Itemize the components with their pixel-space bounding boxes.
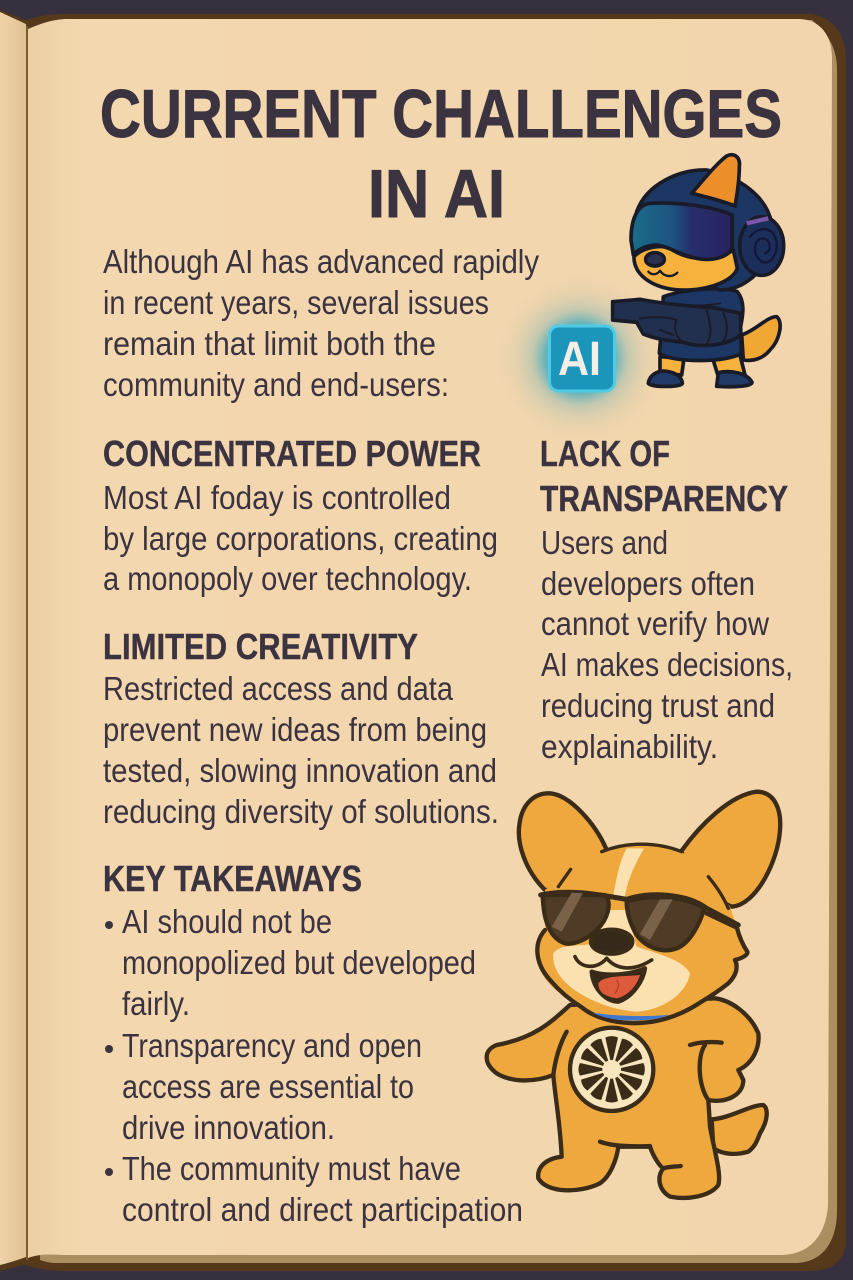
- section: key takeaways: fairly.: [122, 985, 190, 1022]
- section: limited creativity: [103, 626, 499, 830]
- section: key takeaways: control and direct participation: [122, 1191, 523, 1228]
- section: lack of transparency: AI makes decisions,: [541, 646, 793, 683]
- section: lack of transparency: TRANSPARENCY: [540, 478, 788, 519]
- section: limited creativity: tested, slowing innovation and: [103, 752, 497, 789]
- section: lack of transparency: cannot verify how: [541, 605, 769, 642]
- section: concentrated power: [103, 433, 498, 597]
- section: limited creativity: reducing diversity of solutions.: [103, 793, 499, 830]
- section: key takeaways: access are essential to: [122, 1068, 414, 1105]
- section: limited creativity: Restricted access and data: [103, 670, 454, 707]
- intro text: in recent years, several issues: [103, 284, 489, 321]
- section: concentrated power: a monopoly over technology.: [103, 560, 472, 597]
- icon: AI badge: [550, 326, 614, 391]
- section: key takeaways: monopolized but developed: [122, 944, 476, 981]
- intro text: remain that limit both the: [103, 325, 436, 362]
- intro text: [103, 243, 539, 403]
- section: key takeaways: [103, 858, 523, 1228]
- section: key takeaways: KEY TAKEAWAYS: [103, 858, 362, 899]
- section: lack of transparency: developers often: [541, 565, 755, 602]
- section: lack of transparency: LACK OF: [540, 433, 670, 474]
- intro text: community and end-users:: [103, 366, 449, 403]
- icon: AI badge glow: [492, 270, 668, 446]
- mascot: helmeted dog: [613, 155, 784, 387]
- section: key takeaways: Transparency and open: [122, 1027, 422, 1064]
- section: lack of transparency: explainability.: [541, 728, 718, 765]
- section: limited creativity: prevent new ideas from being: [103, 711, 487, 748]
- section: lack of transparency: [540, 433, 793, 765]
- section: lack of transparency: Users and: [541, 524, 668, 561]
- section: concentrated power: CONCENTRATED POWER: [103, 433, 481, 474]
- title: IN AI: [368, 156, 505, 232]
- mascot: corgi with sunglasses: [487, 792, 780, 1198]
- icon: AI badge: AI: [558, 333, 601, 386]
- spine: [26, 26, 28, 1260]
- section: concentrated power: by large corporations, creating: [103, 520, 498, 557]
- section: limited creativity: LIMITED CREATIVITY: [103, 626, 418, 667]
- section: key takeaways: AI should not be: [122, 903, 332, 940]
- section: concentrated power: Most AI foday is controlled: [103, 479, 451, 516]
- intro text: Although AI has advanced rapidly: [103, 243, 539, 280]
- title: [100, 76, 782, 232]
- section: key takeaways: The community must have: [122, 1150, 461, 1187]
- left page: [0, 12, 26, 1265]
- section: lack of transparency: reducing trust and: [541, 687, 775, 724]
- section: key takeaways: drive innovation.: [122, 1109, 335, 1146]
